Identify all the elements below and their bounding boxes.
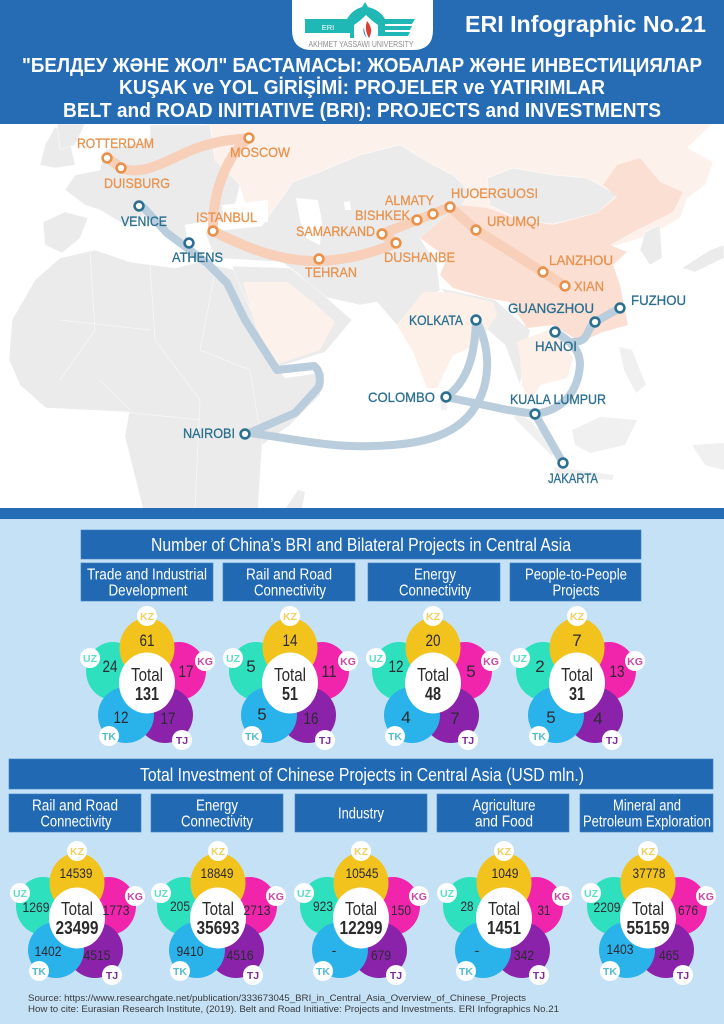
city labels blue: ATHENS — [172, 249, 223, 265]
subheading: agriculture — [437, 794, 569, 832]
flower: energy: 4 — [401, 708, 411, 727]
flower: rail investment: 1269 — [22, 899, 50, 915]
map: caspian and black sea — [222, 198, 351, 245]
flower: mineral investment: 2209 — [594, 899, 621, 915]
city labels orange: MOSCOW — [230, 144, 291, 160]
flower: industry investment: 12299 — [340, 918, 382, 938]
flower: mineral investment: Total — [632, 899, 664, 919]
flower: trade: 17 — [160, 709, 176, 728]
subheading: rail: Rail and Road — [32, 798, 118, 814]
flower: people: 4 — [593, 709, 603, 728]
flower: energy investment: 9410 — [176, 943, 204, 959]
flower: energy investment — [151, 841, 286, 985]
city labels orange: SAMARKAND — [296, 223, 375, 239]
map panel — [0, 124, 724, 509]
flower: energy: 7 — [450, 709, 460, 728]
city labels orange: TEHRAN — [305, 264, 357, 280]
infographic number: ERI Infographic No.21 — [465, 11, 706, 37]
flower: industry investment: Total — [345, 899, 377, 919]
subheading: people — [510, 563, 641, 601]
flower: mineral investment: 37778 — [632, 865, 666, 881]
city labels blue: HANOI — [535, 338, 577, 354]
flower: mineral investment: 676 — [678, 902, 698, 918]
flower: rail: 16 — [304, 709, 318, 728]
flower: agriculture investment: Total — [488, 899, 520, 919]
subheading: agriculture: and Food — [475, 814, 533, 830]
flower: people: 31 — [569, 684, 585, 704]
city labels orange: ROTTERDAM — [77, 135, 154, 151]
flower: trade: 12 — [114, 708, 128, 727]
map: africa borders — [60, 250, 262, 509]
flower: rail investment: 23499 — [56, 918, 98, 938]
flower: rail — [223, 606, 358, 750]
logo: AKHMET YASSAWI UNIVERSITY — [308, 40, 414, 49]
logo: ERI — [322, 23, 334, 32]
flower: people — [510, 606, 645, 750]
subheading: energy — [151, 794, 283, 832]
city labels orange: ALMATY — [385, 192, 435, 208]
flower: trade: 24 — [102, 657, 118, 676]
flower: energy investment: Total — [202, 899, 234, 919]
map: arabia — [232, 266, 352, 368]
source and citation: Source: https://www.researchgate.net/publication/333673045_BRI_in_Central_Asia_Overview_of_Chinese_Projects — [28, 993, 527, 1003]
heading: total investment: Total Investment of Chinese Projects in Central Asia (USD mln.) — [140, 765, 584, 785]
flower: mineral investment — [581, 841, 716, 985]
route: orange silk road belt — [108, 138, 565, 286]
flower: industry investment: - — [332, 942, 337, 958]
flower: people: 2 — [535, 657, 545, 676]
flower: rail investment: 1773 — [102, 902, 130, 918]
city labels orange: ISTANBUL — [196, 209, 257, 225]
flower: people: 7 — [572, 631, 582, 650]
flower: industry investment: 10545 — [346, 865, 379, 881]
flower: energy: 5 — [466, 662, 476, 681]
title — [22, 55, 702, 122]
subheading: people: People-to-People — [525, 566, 627, 584]
source and citation — [28, 993, 559, 1014]
subheading: trade: Development — [108, 582, 188, 600]
city labels orange: DUSHANBE — [384, 249, 455, 265]
subheading: rail: Connectivity — [254, 582, 326, 600]
map markers orange — [103, 134, 569, 290]
logo — [292, 0, 433, 50]
flower: agriculture investment: 1451 — [487, 918, 521, 938]
flower: agriculture investment: 1049 — [492, 865, 519, 881]
flower: agriculture investment: 31 — [538, 902, 551, 918]
flower: people: Total — [561, 665, 593, 685]
heading: number of projects — [81, 530, 641, 559]
city labels blue: JAKARTA — [548, 470, 599, 486]
flower: rail investment — [10, 841, 145, 985]
flower: energy: 12 — [388, 657, 404, 676]
flower: mineral investment: 55159 — [626, 918, 670, 938]
map: africa — [9, 250, 325, 509]
title: KUŞAK ve YOL GİRİŞİMİ: PROJELER ve YATIRIMLAR — [119, 76, 606, 99]
map: madagascar — [286, 490, 305, 508]
flower: industry investment: 150 — [391, 902, 411, 918]
flower: trade: 17 — [178, 662, 194, 681]
flower: agriculture investment — [437, 841, 572, 985]
flower: people: 5 — [546, 708, 556, 727]
map: china — [420, 158, 683, 342]
subheading: rail: Connectivity — [40, 814, 112, 830]
flower: rail investment: 14539 — [60, 865, 93, 881]
flower: rail investment: 4515 — [84, 947, 111, 963]
flower: agriculture investment: 342 — [514, 947, 534, 963]
flower: rail: 51 — [282, 684, 298, 704]
city labels blue: FUZHOU — [631, 292, 686, 308]
flower: industry investment: 679 — [371, 947, 391, 963]
flower: people: 13 — [610, 662, 624, 681]
flower: industry investment — [294, 841, 429, 985]
route: blue maritime road — [143, 207, 620, 463]
subheading: industry: Industry — [338, 806, 384, 822]
flower: rail investment: 1402 — [34, 943, 62, 959]
subheading: rail — [223, 563, 355, 601]
flower: trade: 61 — [140, 631, 154, 650]
subheading: energy: Energy — [414, 566, 456, 584]
subheading: agriculture: Agriculture — [472, 798, 536, 814]
flower: trade: 131 — [135, 684, 159, 704]
city labels orange: URUMQI — [487, 213, 540, 229]
flower: energy: 20 — [426, 631, 440, 650]
city labels blue — [121, 213, 686, 486]
header band — [0, 0, 724, 124]
map: europe and asia land — [40, 124, 724, 385]
flower: energy investment: 4516 — [226, 947, 254, 963]
subheading: energy: Connectivity — [181, 814, 253, 830]
flower: rail: Total — [274, 665, 306, 685]
subheading: rail — [9, 794, 141, 832]
heading: number of projects: Number of China’s BRI and Bilateral Projects in Central Asia — [151, 535, 572, 555]
city labels orange: BISHKEK — [355, 207, 411, 223]
city labels blue: COLOMBO — [368, 389, 435, 405]
subheading: trade: Trade and Industrial — [87, 566, 207, 584]
flower: energy: Total — [417, 665, 449, 685]
divider band — [0, 508, 724, 519]
flower: mineral investment: 465 — [659, 947, 679, 963]
flower: rail: 11 — [322, 662, 336, 681]
flower: industry investment: 923 — [313, 898, 333, 914]
map: south-east asia — [517, 328, 573, 402]
city labels orange: HUOERGUOSI — [451, 185, 538, 201]
city labels orange — [77, 135, 613, 294]
flower: agriculture investment: - — [475, 942, 480, 958]
subheading: energy: Energy — [196, 798, 238, 814]
flower: energy: 48 — [425, 684, 441, 704]
flower: agriculture investment: 28 — [460, 898, 474, 914]
subheading: rail: Rail and Road — [246, 566, 332, 584]
source and citation: How to cite: Eurasian Research Institute, (2019). Belt and Road Initiative: Projects and Investments. ERI Infographics No.21 — [28, 1004, 559, 1014]
flower: energy investment: 18849 — [200, 865, 234, 881]
map: islands — [440, 347, 724, 480]
subheading: mineral — [580, 794, 713, 832]
flower: rail: 14 — [283, 631, 297, 650]
flower: energy investment: 35693 — [196, 918, 240, 938]
city labels blue: GUANGZHOU — [508, 300, 594, 316]
title: BELT and ROAD INITIATIVE (BRI): PROJECTS and INVESTMENTS — [63, 100, 661, 122]
subheading: energy — [368, 563, 500, 601]
city labels blue: VENICE — [121, 213, 167, 229]
map: india — [397, 292, 497, 388]
flower: trade: Total — [131, 665, 163, 685]
city labels orange: LANZHOU — [549, 252, 613, 268]
flower: energy — [366, 606, 501, 750]
city labels orange: DUISBURG — [104, 175, 170, 191]
map markers blue — [135, 202, 624, 467]
subheading: trade — [81, 563, 213, 601]
subheading: energy: Connectivity — [399, 582, 471, 600]
subheading: industry — [295, 794, 427, 832]
flower: trade — [80, 606, 215, 750]
flower: rail: 5 — [257, 705, 267, 724]
city labels blue: KUALA LUMPUR — [510, 391, 606, 407]
flower: energy investment: 2713 — [244, 902, 271, 918]
heading: total investment — [9, 759, 713, 789]
city labels blue: KOLKATA — [409, 312, 464, 328]
map: russia — [205, 124, 713, 250]
flower: rail: 5 — [246, 657, 256, 676]
flower: energy investment: 205 — [170, 898, 190, 914]
city labels blue: NAIROBI — [183, 425, 235, 441]
subheading: people: Projects — [552, 582, 600, 600]
subheading: mineral: Mineral and — [613, 798, 681, 814]
flower: mineral investment: 1403 — [606, 941, 634, 957]
flower: rail investment: Total — [61, 899, 93, 919]
city labels orange: XIAN — [574, 278, 604, 294]
